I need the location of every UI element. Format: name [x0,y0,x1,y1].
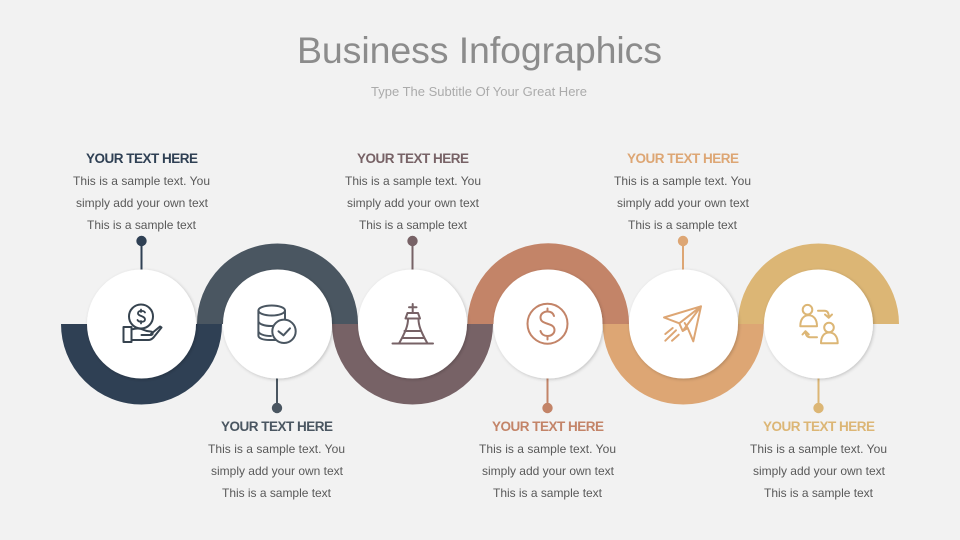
icon: dollar coin [528,304,568,344]
step 1: funding [73,151,210,378]
step 3 pin [407,236,418,272]
step 4 circle [494,270,602,378]
step 3: strategy [345,151,481,378]
wave ribbon [74,256,886,391]
step 4: money [479,270,616,500]
step 4 heading: YOUR TEXT HERE [492,419,604,434]
step 2 text: simply add your own text [211,464,344,478]
step 5 text: This is a sample text [628,218,738,232]
step 5: launch [614,151,751,378]
step 6 circle [764,270,873,378]
step 6 text [750,442,887,500]
step 2 pin [272,376,282,413]
step 3 circle [358,270,467,378]
step 2 text: This is a sample text [222,486,332,500]
step 1 text [73,174,210,232]
step 2: database [208,270,345,500]
step 5 text: This is a sample text. You [614,174,751,188]
step 2 heading: YOUR TEXT HERE [221,419,333,434]
icon: paper plane [664,306,701,341]
step 3 text: simply add your own text [347,196,480,210]
title: Business Infographics [297,29,662,71]
icon: chess king [392,304,433,344]
icon: hand holding coin [124,304,162,342]
step 6 text: simply add your own text [753,464,886,478]
icon: database check [258,306,296,343]
step 3 text: This is a sample text [359,218,468,232]
step 5 circle [629,270,738,378]
step 1 text: This is a sample text. You [73,174,210,188]
step 3 heading: YOUR TEXT HERE [357,151,469,166]
step 6: exchange [750,270,887,500]
step 1 text: This is a sample text [87,218,197,232]
step 1 circle [87,270,196,378]
step 6 pin [813,376,824,413]
step 6 text: This is a sample text [764,486,874,500]
step 3 text: This is a sample text. You [345,174,481,188]
step 1 text: simply add your own text [76,196,209,210]
step 2 circle [223,270,332,378]
step 4 text: simply add your own text [482,464,615,478]
icon: people exchange [800,305,838,343]
step 6 heading: YOUR TEXT HERE [763,419,875,434]
step 3 text [345,174,481,232]
step 2 text [208,442,345,500]
subtitle: Type The Subtitle Of Your Great Here [371,84,587,99]
step 1 heading: YOUR TEXT HERE [86,151,198,166]
step 4 text: This is a sample text. You [479,442,616,456]
step 5 text [614,174,751,232]
step 5 text: simply add your own text [617,196,750,210]
step 4 text [479,442,616,500]
step 6 text: This is a sample text. You [750,442,887,456]
step 5 pin [678,236,688,272]
step 4 pin [542,376,553,413]
step 1 pin [136,236,147,272]
step 2 text: This is a sample text. You [208,442,345,456]
step 5 heading: YOUR TEXT HERE [627,151,739,166]
step 4 text: This is a sample text [493,486,603,500]
